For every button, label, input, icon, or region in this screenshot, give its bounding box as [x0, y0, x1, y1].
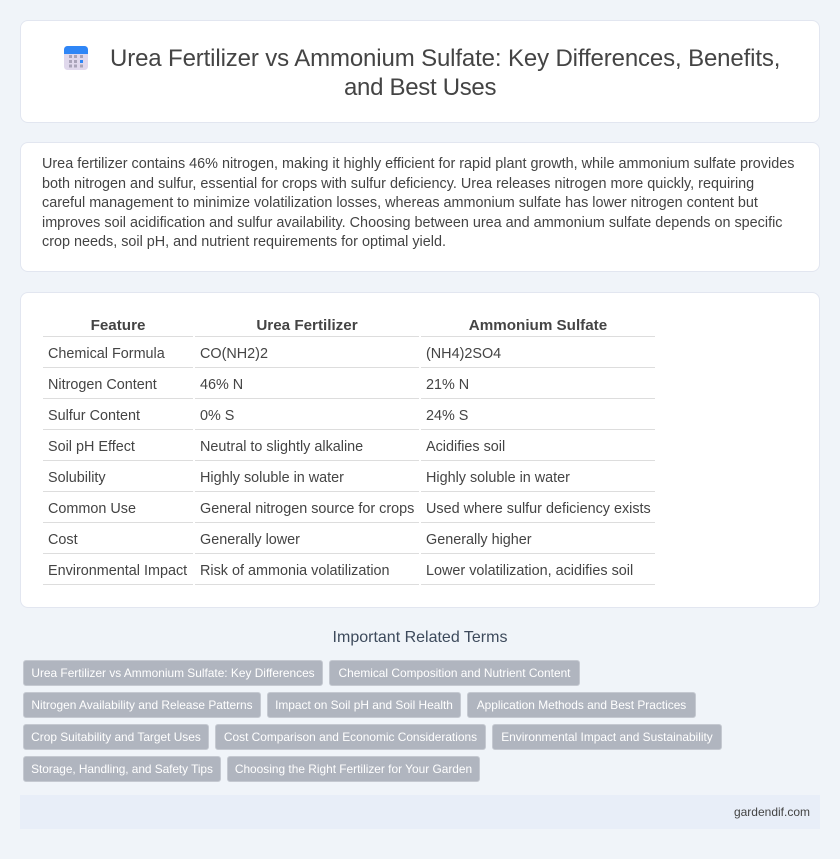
summary text	[42, 156, 794, 250]
related term tags: Crop Suitability and Target Uses	[31, 730, 201, 744]
summary text: crop needs, soil pH, and nutrient requirements for optimal yield.	[42, 234, 446, 250]
comparison table: General nitrogen source for crops	[200, 501, 414, 517]
summary text: careful management to minimize volatilization losses, whereas ammonium sulfate has lower nitrogen content but	[42, 195, 758, 211]
comparison table: Neutral to slightly alkaline	[200, 439, 363, 455]
related term tags	[23, 660, 722, 782]
related term tags: Cost Comparison and Economic Considerations	[224, 730, 477, 744]
related term tags: Application Methods and Best Practices	[477, 698, 686, 712]
panel: header	[20, 20, 820, 123]
comparison table: Highly soluble in water	[200, 470, 344, 486]
related term tags: Impact on Soil pH and Soil Health	[275, 698, 453, 712]
comparison table: Chemical Formula	[48, 346, 165, 362]
related term tags: Urea Fertilizer vs Ammonium Sulfate: Key Differences	[31, 666, 315, 680]
icon: calendar	[64, 46, 88, 70]
comparison table: 21% N	[426, 377, 469, 393]
panel: summary	[20, 142, 820, 272]
comparison table: Common Use	[48, 501, 136, 517]
related term tags: Storage, Handling, and Safety Tips	[31, 762, 213, 776]
title	[110, 45, 780, 101]
footer source: gardendif.com	[734, 805, 810, 819]
footer bar	[20, 795, 820, 829]
comparison table	[43, 317, 655, 585]
comparison table: Environmental Impact	[48, 563, 187, 579]
comparison table: Urea Fertilizer	[256, 317, 358, 334]
comparison table: 24% S	[426, 408, 468, 424]
comparison table: 46% N	[200, 377, 243, 393]
title: and Best Uses	[344, 74, 496, 101]
related term tags: Choosing the Right Fertilizer for Your Garden	[235, 762, 472, 776]
comparison table: Solubility	[48, 470, 106, 486]
comparison table: Sulfur Content	[48, 408, 140, 424]
summary text: both nitrogen and sulfur, essential for crops with sulfur deficiency. Urea releases nitrogen more quickly, requiring	[42, 176, 754, 192]
comparison table: Feature	[91, 317, 145, 334]
summary text: improves soil acidification and sulfur availability. Choosing between urea and ammonium sulfate depends on specific	[42, 215, 782, 231]
comparison table: Highly soluble in water	[426, 470, 570, 486]
panel: comparison table	[20, 292, 820, 608]
comparison table: Nitrogen Content	[48, 377, 157, 393]
comparison table: Generally higher	[426, 532, 532, 548]
comparison table: Acidifies soil	[426, 439, 505, 455]
comparison table: Cost	[48, 532, 78, 548]
title: Urea Fertilizer vs Ammonium Sulfate: Key Differences, Benefits,	[110, 45, 780, 72]
comparison table: CO(NH2)2	[200, 346, 268, 362]
heading: important related terms: Important Related Terms	[333, 629, 507, 646]
comparison table: Lower volatilization, acidifies soil	[426, 563, 633, 579]
summary text: Urea fertilizer contains 46% nitrogen, making it highly efficient for rapid plant growth, while ammonium sulfate provides	[42, 156, 794, 172]
comparison table: Risk of ammonia volatilization	[200, 563, 390, 579]
comparison table: Generally lower	[200, 532, 300, 548]
related term tags: Environmental Impact and Sustainability	[501, 730, 713, 744]
comparison table: Used where sulfur deficiency exists	[426, 501, 651, 517]
comparison table: Ammonium Sulfate	[469, 317, 607, 334]
comparison table: 0% S	[200, 408, 234, 424]
related term tags: Nitrogen Availability and Release Patterns	[31, 698, 253, 712]
comparison table: (NH4)2SO4	[426, 346, 501, 362]
comparison table: Soil pH Effect	[48, 439, 135, 455]
related term tags: Chemical Composition and Nutrient Content	[338, 666, 570, 680]
